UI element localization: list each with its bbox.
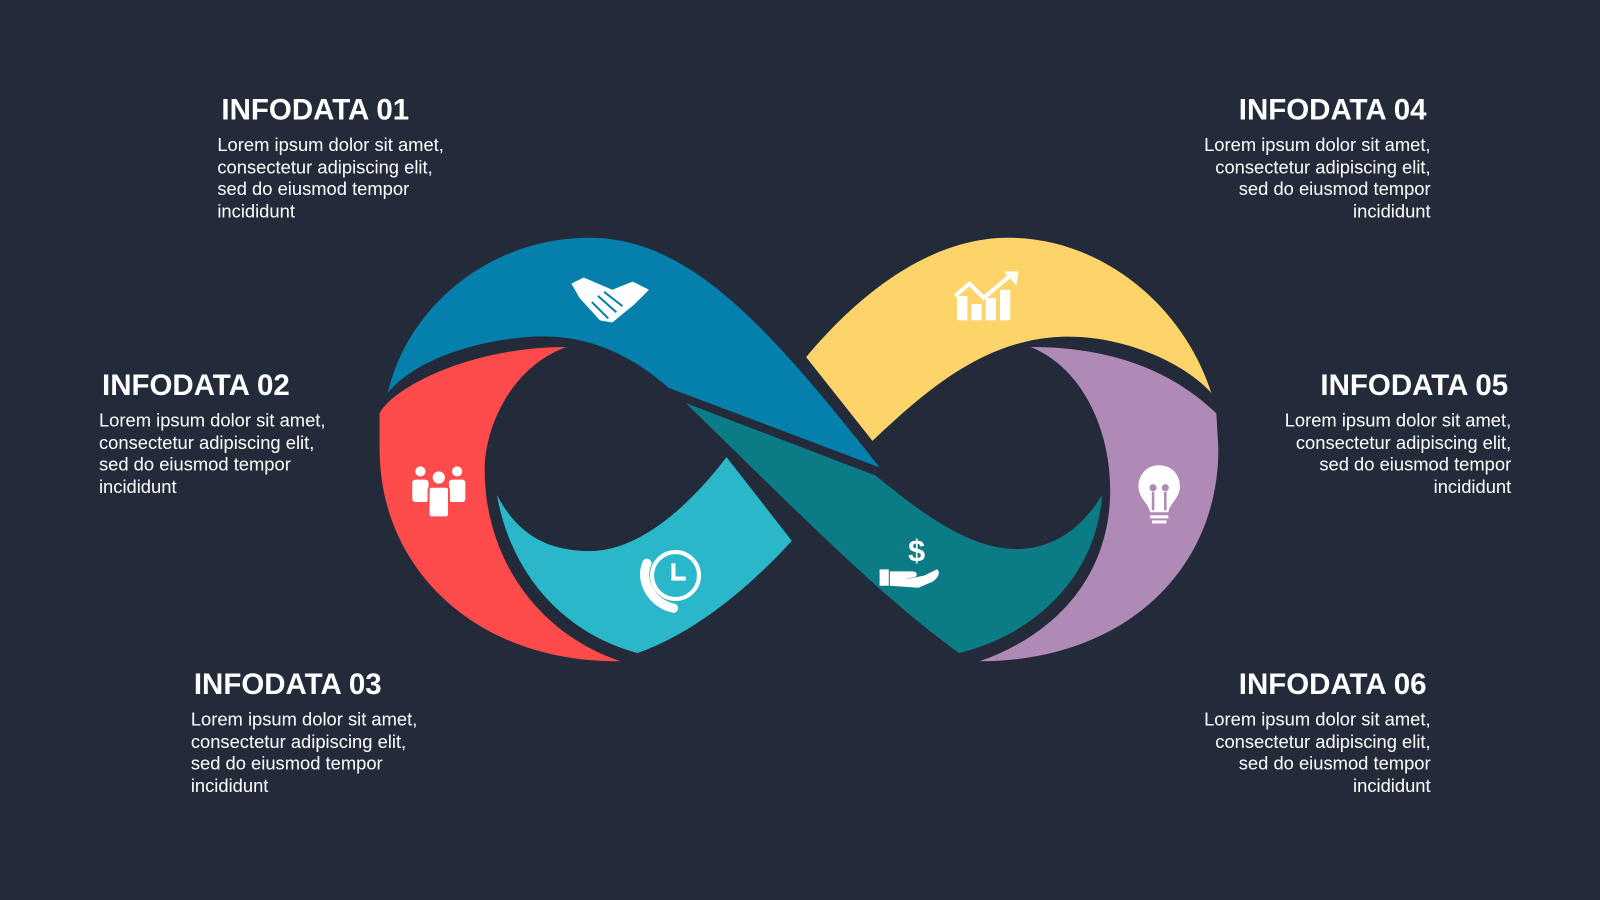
segment: yellow top-right <box>806 238 1211 441</box>
text block: infodata 05: consectetur adipiscing elit, <box>1296 432 1511 453</box>
text block: infodata 06: consectetur adipiscing elit, <box>1215 731 1431 752</box>
text block: infodata 04: incididunt <box>1353 200 1431 221</box>
text block: infodata 02 <box>99 369 326 497</box>
text block: infodata 04: consectetur adipiscing elit, <box>1215 156 1431 177</box>
text block: infodata 06 <box>1204 668 1431 796</box>
icon: team <box>412 466 465 517</box>
text block: infodata 01: INFODATA 01 <box>221 93 409 126</box>
text block: infodata 01: Lorem ipsum dolor sit amet, <box>217 134 444 155</box>
text block: infodata 04: INFODATA 04 <box>1239 93 1427 126</box>
text block: infodata 01 <box>217 93 444 221</box>
text block: infodata 06: INFODATA 06 <box>1239 668 1427 701</box>
text block: infodata 03: consectetur adipiscing elit, <box>191 731 406 752</box>
icon: bar chart <box>955 271 1018 320</box>
text block: infodata 04: Lorem ipsum dolor sit amet, <box>1204 134 1431 155</box>
segment: teal bottom-center <box>686 403 1102 653</box>
icon: phone clock <box>645 552 699 608</box>
segment: purple right <box>980 347 1218 661</box>
segment: cyan bottom-left <box>497 457 792 653</box>
text block: infodata 04 <box>1204 93 1431 221</box>
text block: infodata 04: sed do eiusmod tempor <box>1239 178 1431 199</box>
text block: infodata 03 <box>191 668 417 796</box>
segment: blue top-left <box>388 238 880 467</box>
text block: infodata 03: INFODATA 03 <box>194 668 382 701</box>
text block: infodata 02: INFODATA 02 <box>102 369 290 402</box>
text block: infodata 06: Lorem ipsum dolor sit amet, <box>1204 709 1431 730</box>
text block: infodata 06: sed do eiusmod tempor <box>1239 752 1431 773</box>
text block: infodata 03: Lorem ipsum dolor sit amet, <box>191 709 417 730</box>
text block: infodata 05 <box>1285 369 1511 497</box>
text block: infodata 02: Lorem ipsum dolor sit amet, <box>99 410 326 431</box>
text block: infodata 01: consectetur adipiscing elit, <box>217 156 433 177</box>
text block: infodata 02: sed do eiusmod tempor <box>99 453 291 474</box>
icon: hand with dollar: $ <box>908 534 925 568</box>
text block: infodata 05: sed do eiusmod tempor <box>1319 453 1511 474</box>
text block: infodata 01: sed do eiusmod tempor <box>217 178 409 199</box>
text block: infodata 03: incididunt <box>191 775 268 796</box>
icon: light bulb <box>1138 465 1180 523</box>
text block: infodata 02: consectetur adipiscing elit, <box>99 432 314 453</box>
icon: handshake <box>571 278 649 322</box>
text block: infodata 06: incididunt <box>1353 775 1431 796</box>
text block: infodata 01: incididunt <box>217 200 295 221</box>
text block: infodata 05: INFODATA 05 <box>1320 369 1508 402</box>
infinity diagram <box>380 238 1218 661</box>
icon: hand with dollar <box>880 534 939 588</box>
text block: infodata 05: Lorem ipsum dolor sit amet, <box>1285 410 1511 431</box>
text block: infodata 02: incididunt <box>99 476 177 497</box>
segment: red left <box>380 347 620 661</box>
text block: infodata 05: incididunt <box>1434 476 1511 497</box>
text block: infodata 03: sed do eiusmod tempor <box>191 752 383 773</box>
